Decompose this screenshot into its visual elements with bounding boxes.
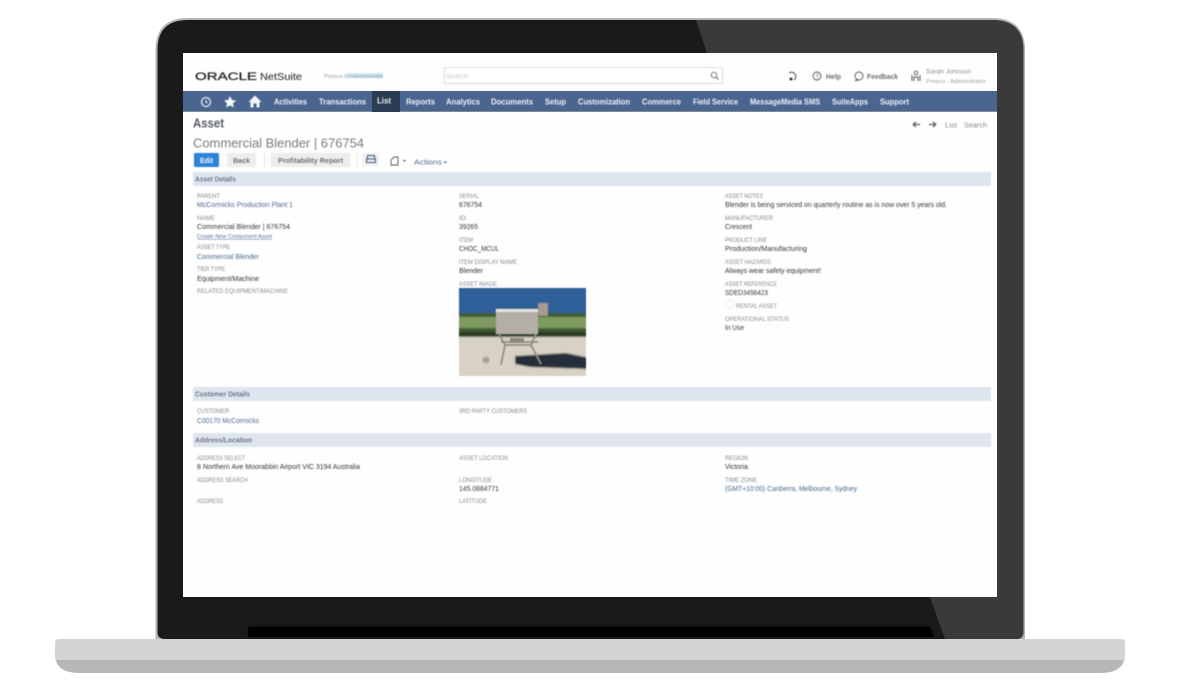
lid bottom strip	[248, 626, 934, 637]
company label: Presco Environmental	[324, 74, 383, 80]
top right utilities: Sarah Johnson	[926, 68, 972, 76]
section: Address/Location: LATITUDE	[459, 498, 487, 505]
navigation bar	[183, 91, 997, 112]
fields column 1: TIER TYPE	[197, 266, 225, 273]
top right utilities: ?	[816, 74, 820, 80]
section: Address/Location: REGION	[725, 455, 748, 462]
page heading: Asset	[193, 116, 225, 130]
fields column 1: McCormicks Production Plant 1	[197, 200, 293, 209]
action buttons: Edit	[200, 156, 213, 165]
page navigation links: List	[945, 120, 958, 130]
section: Asset Details: Asset Details	[195, 174, 236, 184]
search box: Search	[446, 74, 468, 80]
page navigation links	[913, 120, 987, 130]
fields column 1: NAME	[197, 215, 215, 222]
fields column 1	[197, 193, 293, 295]
section: Address/Location: LONGITUDE	[459, 477, 492, 484]
fields column 3: In Use	[725, 323, 744, 332]
screen	[183, 53, 997, 597]
section: Address/Location: Victoria	[725, 462, 749, 471]
lid glare	[696, 20, 1024, 639]
top right utilities: Help	[826, 72, 841, 81]
fields column 1: Equipment/Machine	[197, 274, 259, 283]
navigation bar: Reports	[406, 98, 436, 106]
fields column 3: MANUFACTURER	[725, 215, 773, 222]
logo: Oracle NetSuite: ORACLE	[195, 71, 257, 83]
fields column 3	[725, 193, 947, 332]
fields column 2: SERIAL	[459, 193, 480, 200]
fields column 1: Commercial Blender | 676754	[197, 222, 290, 231]
navigation bar: SuiteApps	[832, 98, 868, 106]
base shadow band	[56, 660, 1124, 673]
laptop base	[55, 639, 1125, 673]
action buttons: Actions	[414, 158, 442, 166]
section: Address/Location: 145.0884771	[459, 484, 499, 493]
fields column 2: ITEM	[459, 237, 473, 244]
fields column 2: ID	[459, 215, 467, 222]
fields column 3: RENTAL ASSET	[736, 303, 777, 310]
fields column 1: Commercial Blender	[197, 252, 259, 261]
search box	[444, 68, 722, 84]
fields column 2	[459, 193, 517, 288]
navigation bar: Analytics	[446, 98, 481, 106]
fields column 2: Blender	[459, 266, 483, 275]
fields column 2: ITEM DISPLAY NAME	[459, 259, 517, 266]
fields column 3: ASSET REFERENCE	[725, 281, 777, 288]
navigation bar: Transactions	[319, 98, 367, 106]
fields column 1: ASSET TYPE	[197, 244, 230, 251]
fields column 2: 39265	[459, 222, 478, 231]
section: Address/Location: ADDRESS SEARCH	[197, 477, 248, 484]
navigation bar: Field Service	[693, 98, 739, 106]
section: Address/Location: ASSET LOCATION	[459, 455, 508, 462]
fields column 3: Production/Manufacturing	[725, 244, 807, 253]
section: Customer Details: CUSTOMER	[197, 408, 229, 415]
action buttons	[194, 153, 447, 167]
section: Customer Details: C00170 McCormicks	[197, 416, 259, 425]
section: Address/Location: (GMT+10:00) Canberra, Melbourne, Sydney	[725, 484, 857, 493]
laptop lid	[156, 18, 1025, 639]
section: Address/Location: ADDRESS	[197, 498, 223, 505]
page heading	[193, 116, 364, 150]
fields column 1: Create New Component Asset	[197, 234, 273, 240]
navigation bar: MessageMedia SMS	[750, 98, 821, 106]
fields column 3: ASSET HAZARDS	[725, 259, 771, 266]
section: Address/Location	[193, 433, 991, 505]
navigation bar: Documents	[491, 98, 534, 106]
fields column 3: Always wear safety equipment!	[725, 266, 821, 275]
top right utilities	[789, 68, 986, 85]
nav icons	[202, 96, 262, 108]
page heading: Commercial Blender | 676754	[193, 136, 364, 150]
fields column 3: Blender is being serviced on quarterly routine as is now over 5 years old.	[725, 200, 947, 209]
navigation bar: List	[377, 96, 391, 106]
top right utilities: Presco - Administrator	[926, 79, 986, 85]
section: Customer Details: Customer Details	[195, 390, 250, 398]
action buttons: Profitability Report	[278, 156, 343, 165]
section: Asset Details	[193, 172, 991, 385]
fields column 3: Crescent	[725, 222, 752, 231]
fields column 2: 676754	[459, 200, 482, 209]
section: Customer Details	[193, 387, 991, 425]
asset image: blender photo	[458, 287, 587, 376]
section: Address/Location: 8 Northern Ave Moorabbin Airport VIC 3194 Australia	[197, 462, 361, 471]
navigation bar: Activities	[274, 98, 308, 106]
fields column 1: PARENT	[197, 193, 220, 200]
top right utilities: Feedback	[867, 72, 899, 81]
section: Address/Location: ADDRESS SELECT	[197, 455, 245, 462]
page navigation links: Search	[964, 120, 987, 130]
navigation bar: Commerce	[642, 98, 682, 106]
fields column 3: ASSET NOTES	[725, 193, 763, 200]
fields column 3: PRODUCT LINE	[725, 237, 767, 244]
section: Address/Location: Address/Location	[195, 436, 252, 444]
fields column 2: ASSET IMAGE	[459, 281, 497, 288]
logo: Oracle NetSuite	[195, 71, 302, 83]
section: Address/Location: TIME ZONE	[725, 477, 757, 484]
navigation bar: Customization	[578, 98, 630, 106]
fields column 3: SDED3456423	[725, 288, 768, 297]
navigation bar: Setup	[545, 98, 566, 106]
section: Customer Details: 3RD PARTY CUSTOMERS	[459, 408, 527, 415]
logo: Oracle NetSuite: NetSuite	[260, 71, 302, 83]
fields column 3: OPERATIONAL STATUS	[725, 316, 789, 323]
fields column 1: RELATED EQUIPMENT/MACHINE	[197, 288, 288, 295]
action buttons: Back	[233, 156, 251, 165]
navigation bar: Support	[880, 98, 909, 106]
fields column 2: CHOC_MCUL	[459, 244, 499, 253]
